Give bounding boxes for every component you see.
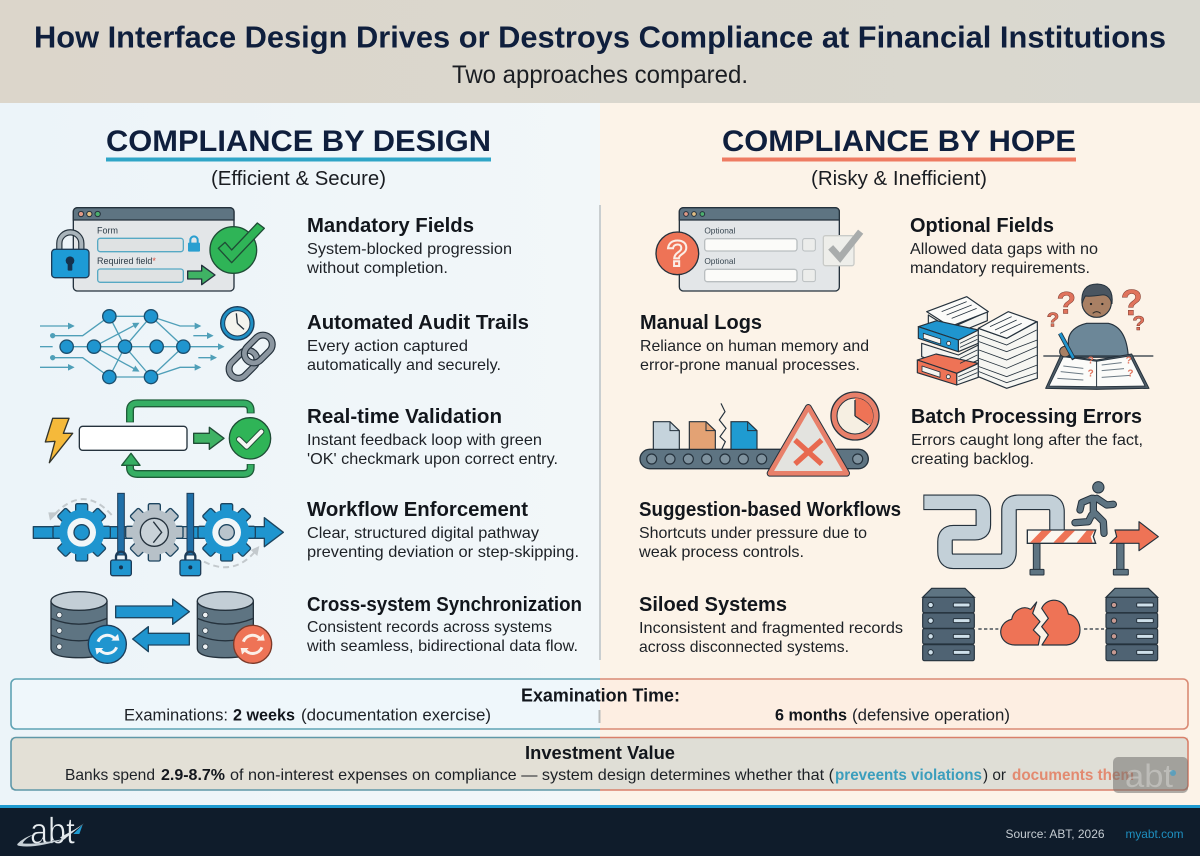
text: batch processing errors — [911, 406, 1143, 468]
callout: investment value — [11, 738, 1188, 790]
text: optional fields — [910, 215, 1098, 277]
text: mandatory fields: without completion. — [306, 260, 448, 277]
icon: winding path, broken barrier and runner — [923, 482, 1158, 575]
text: optional fields: Optional Fields — [910, 215, 1054, 237]
heading: compliance by hope: COMPLIANCE BY HOPE — [722, 125, 1076, 158]
feature: workflow enforcement — [33, 493, 579, 576]
text: workflow enforcement: Clear, structured digital pathway — [307, 525, 539, 542]
website: myabt.com — [1126, 827, 1184, 841]
footer logo: abt — [30, 810, 76, 852]
feature: mandatory fields — [52, 208, 512, 291]
feature: suggestion-based workflows — [638, 482, 1158, 575]
text: cross-system synchronization: with seamless, bidirectional data flow. — [306, 638, 578, 655]
feature: cross-system synchronization — [51, 592, 582, 663]
icon: paper stacks and confused person writing — [917, 282, 1153, 389]
callout: investment value: 2.9-8.7% — [161, 767, 225, 784]
text: mandatory fields: System-blocked progression — [307, 241, 512, 258]
heading: compliance by hope — [722, 125, 1076, 190]
text: batch processing errors: Errors caught long after the fact, — [911, 432, 1143, 449]
icon: conveyor with documents, warning triangle and clock — [640, 392, 879, 473]
callout: examination time: (documentation exercise) — [301, 706, 491, 724]
callout: examination time — [11, 679, 1188, 729]
text: manual logs — [640, 312, 869, 374]
callout: investment value: Banks spend — [65, 767, 155, 784]
heading: compliance by design: (Efficient & Secure) — [211, 168, 386, 190]
watermark logo: abt — [1125, 758, 1173, 794]
icon: paper stacks and confused person writing: ? — [1127, 369, 1133, 380]
callout: investment value: documents them — [1012, 767, 1134, 784]
text: real-time validation — [307, 406, 558, 468]
icon: two servers with broken cloud — [923, 588, 1158, 661]
feature: siloed systems — [639, 588, 1158, 661]
text: suggestion-based workflows: Shortcuts under pressure due to — [639, 525, 867, 542]
text: suggestion-based workflows: weak process controls. — [638, 544, 804, 561]
title: How Interface Design Drives or Destroys Compliance at Financial Institutions — [34, 20, 1166, 54]
text: real-time validation: Instant feedback loop with green — [307, 432, 542, 449]
text: cross-system synchronization — [306, 594, 582, 655]
panel background: left — [0, 103, 600, 805]
text: manual logs: Manual Logs — [640, 312, 762, 334]
icon: paper stacks and confused person writing: ? — [1126, 355, 1132, 366]
icon: two databases with sync arrows — [51, 592, 272, 663]
callout: investment value: Investment Value — [525, 743, 675, 763]
text: mandatory fields: Mandatory Fields — [307, 215, 474, 237]
feature: optional fields — [656, 208, 1098, 291]
text: automated audit trails: Automated Audit Trails — [307, 312, 529, 334]
text: manual logs: error-prone manual processes. — [640, 357, 860, 374]
icon: optional form with question mark — [656, 208, 861, 291]
icon: paper stacks and confused person writing: ? — [1121, 282, 1143, 323]
text: automated audit trails: Every action captured — [307, 338, 468, 355]
icon: optional form with question mark: Optional — [704, 225, 736, 235]
text: siloed systems: across disconnected systems. — [639, 639, 849, 656]
source: Source: ABT, 2026 — [1006, 827, 1105, 841]
text: optional fields: mandatory requirements. — [910, 260, 1090, 277]
callout: examination time: Examinations: — [124, 706, 228, 724]
text: suggestion-based workflows: Suggestion-based Workflows — [639, 499, 901, 521]
footer — [0, 805, 1200, 856]
text: suggestion-based workflows — [638, 499, 901, 561]
text: workflow enforcement: Workflow Enforcement — [307, 499, 528, 521]
panel: compliance by design — [33, 125, 582, 663]
icon: gears on a locked arrow pathway — [33, 493, 283, 576]
header band — [0, 0, 1200, 103]
icon: validation loop with lightning bolt — [45, 403, 271, 474]
text: batch processing errors: creating backlog. — [911, 451, 1034, 468]
callout: examination time: (defensive operation) — [852, 706, 1010, 724]
icon: node network with clock and chain — [40, 307, 276, 384]
icon: form with lock and checkmark: Form — [97, 226, 118, 236]
feature: manual logs — [640, 282, 1153, 389]
subtitle: Two approaches compared. — [452, 61, 748, 89]
watermark logo — [1113, 757, 1188, 794]
icon: paper stacks and confused person writing: ? — [1088, 355, 1094, 366]
heading: compliance by design: COMPLIANCE BY DESIGN — [106, 125, 491, 158]
icon: form with lock and checkmark — [52, 208, 264, 291]
text: manual logs: Reliance on human memory and — [640, 338, 869, 355]
text: mandatory fields — [306, 215, 512, 277]
callout: investment value: of non-interest expenses on compliance — system design determines whether that ( — [230, 767, 835, 784]
heading: compliance by design — [106, 125, 491, 190]
icon: paper stacks and confused person writing: ? — [1047, 309, 1059, 332]
panel: compliance by hope — [638, 125, 1158, 661]
text: batch processing errors: Batch Processing Errors — [911, 406, 1142, 428]
callout: examination time: 2 weeks — [233, 706, 295, 724]
text: siloed systems — [639, 594, 903, 656]
callout: examination time: 6 months — [775, 706, 847, 724]
text: real-time validation: Real-time Validation — [307, 406, 502, 428]
feature: batch processing errors — [640, 392, 1143, 473]
icon: paper stacks and confused person writing: ? — [1088, 369, 1094, 380]
callout: examination time: Examination Time: — [521, 686, 680, 706]
text: cross-system synchronization: Consistent records across systems — [307, 619, 552, 636]
text: workflow enforcement — [307, 499, 579, 561]
heading: compliance by hope: (Risky & Inefficient) — [811, 168, 987, 190]
icon: paper stacks and confused person writing: ? — [1057, 284, 1076, 320]
icon: paper stacks and confused person writing: ? — [1132, 312, 1145, 335]
feature: real-time validation — [45, 403, 558, 474]
callout: investment value: ) or — [983, 767, 1007, 784]
text: siloed systems: Siloed Systems — [639, 594, 787, 616]
feature: automated audit trails — [40, 307, 529, 384]
text: cross-system synchronization: Cross-system Synchronization — [307, 594, 582, 616]
icon: optional form with question mark: Optional — [704, 256, 736, 266]
text: automated audit trails: automatically and securely. — [307, 357, 501, 374]
text: optional fields: Allowed data gaps with no — [910, 241, 1098, 258]
text: real-time validation: 'OK' checkmark upon correct entry. — [307, 451, 558, 468]
text: workflow enforcement: preventing deviation or step-skipping. — [307, 544, 579, 561]
text: automated audit trails — [307, 312, 529, 374]
callout: investment value: preveents violations — [835, 767, 982, 784]
icon: optional form with question mark: ? — [666, 233, 688, 274]
panel background: right — [600, 103, 1200, 805]
icon: form with lock and checkmark: Required field* — [97, 256, 156, 266]
text: siloed systems: Inconsistent and fragmented records — [639, 620, 903, 637]
